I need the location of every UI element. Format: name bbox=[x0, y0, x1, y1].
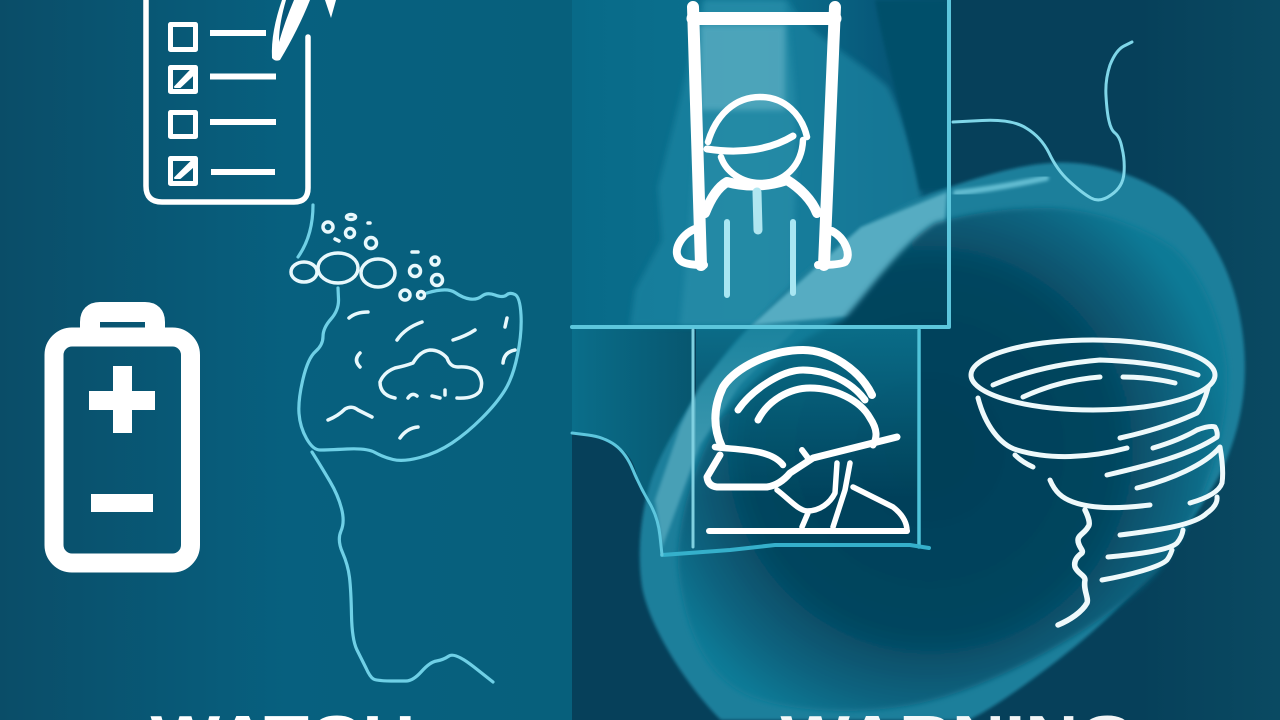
icon: worker in doorway bbox=[677, 7, 848, 295]
icon: hard hat worker bbox=[707, 350, 907, 531]
panel: warning bbox=[572, 0, 1280, 720]
map: outlined region with clouds bbox=[291, 205, 521, 682]
frame lines bbox=[572, 0, 1132, 555]
icon: tornado bbox=[971, 340, 1223, 625]
icon: battery bbox=[54, 312, 190, 563]
frame background streaks bbox=[572, 0, 950, 555]
panel: watch bbox=[0, 0, 572, 720]
swirl ring bbox=[640, 162, 1245, 720]
icon: checklist bbox=[146, 0, 336, 202]
